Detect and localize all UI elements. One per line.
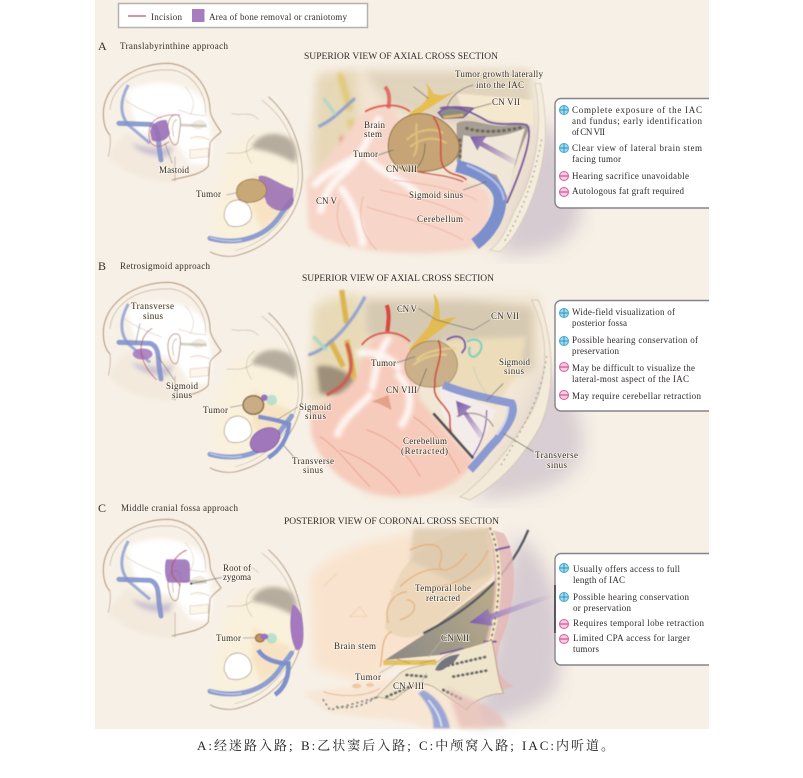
label: CN VII C: CN VII: [441, 633, 469, 643]
icon: plus: [560, 106, 568, 114]
con text 2: May require cerebellar retraction: [572, 391, 702, 401]
label: Sigmoid sinus oblique: Sigmoid: [299, 402, 332, 412]
caption: A:经迷路入路;: [197, 738, 295, 753]
icon: minus: [560, 620, 568, 628]
con text 1: Requires temporal lobe retraction: [573, 618, 704, 628]
legend: bone removal label: Area of bone removal or craniotomy: [209, 12, 348, 22]
panel C view title: POSTERIOR VIEW OF CORONAL CROSS SECTION: [284, 517, 499, 527]
label: CN VII A: CN VII: [492, 97, 520, 107]
con text 2: [573, 633, 690, 654]
label: Cerebellum A: Cerebellum: [417, 214, 463, 224]
pro text 2: or preservation: [573, 603, 632, 613]
con text 1: lateral-most aspect of the IAC: [572, 374, 689, 384]
label: Cerebellum retracted: [401, 436, 448, 456]
panel A view title: SUPERIOR VIEW OF AXIAL CROSS SECTION: [304, 52, 498, 62]
label: Cerebellum retracted: (Retracted): [401, 446, 448, 456]
pro text 1: Complete exposure of the IAC: [572, 105, 702, 115]
caption: B:乙状窦后入路;: [301, 738, 413, 753]
label: Sigmoid sinus oblique: sinus: [305, 411, 326, 421]
icon: plus: [560, 336, 568, 346]
label: Temporal lobe retracted: [415, 583, 471, 603]
label: CN VIII C: CN VIII: [393, 681, 424, 691]
label: Transverse sinus skull: [131, 301, 174, 321]
con text 1: [572, 363, 695, 384]
panel C heading: Middle cranial fossa approach: [121, 503, 238, 513]
panel C coronal cross section illustration: [303, 528, 561, 728]
label: Transverse sinus oblique: sinus: [303, 465, 323, 475]
label: Tumor oblique B: Tumor: [203, 405, 228, 415]
icon: plus: [560, 564, 568, 572]
label: Transverse sinus B: sinus: [547, 460, 567, 470]
label: Temporal lobe retracted: Temporal lobe: [415, 583, 471, 593]
label: Tumor growth: Tumor growth laterally: [455, 69, 544, 79]
label: into the IAC: into the IAC: [476, 80, 524, 90]
background panel: [95, 0, 709, 729]
con text 2: Autologous fat graft required: [572, 186, 684, 196]
pro text 2: facing tumor: [572, 154, 621, 164]
panel A side skull illustration: [103, 63, 221, 182]
pro text 1: of CN VII: [572, 127, 605, 137]
panel B view title: SUPERIOR VIEW OF AXIAL CROSS SECTION: [302, 274, 494, 284]
pro text 1: length of IAC: [573, 575, 625, 585]
panel B letter: B: [98, 259, 106, 273]
pro text 2: [572, 143, 702, 164]
label: Sigmoid sinus B: [499, 357, 530, 376]
icon: minus: [560, 362, 568, 372]
label: Sigmoid sinus oblique: [299, 402, 332, 421]
panel A heading: Translabyrinthine approach: [120, 41, 228, 51]
con text 1: Hearing sacrifice unavoidable: [572, 171, 689, 181]
caption: IAC:内听道。: [522, 738, 616, 753]
callout C: [555, 554, 709, 665]
label: Transverse sinus B: [535, 450, 578, 470]
legend: incision label: Incision: [151, 12, 182, 22]
label: Brain: Brain: [364, 120, 386, 130]
pro text 2: preservation: [572, 346, 620, 356]
con text 2: tumors: [573, 644, 599, 654]
pro text 1: [572, 307, 675, 328]
pro text 1: posterior fossa: [572, 318, 627, 328]
pro text 1: [573, 564, 680, 585]
icon: minus: [560, 390, 568, 400]
panel C oblique skull illustration: [210, 550, 303, 709]
label: Tumor C: Tumor: [355, 672, 381, 682]
label: Tumor oblique C: Tumor: [216, 633, 241, 643]
label: Root of zygoma: Root of: [223, 563, 251, 573]
label: Root of zygoma: [223, 563, 251, 582]
legend: incision line: [128, 15, 146, 17]
caption: C:中颅窝入路;: [419, 738, 516, 753]
panel B axial cross section illustration: [308, 290, 583, 500]
pro text 1: and fundus; early identification: [572, 116, 702, 126]
label: Temporal lobe retracted: retracted: [426, 593, 460, 603]
pro text 1: Wide-field visualization of: [572, 307, 675, 317]
label: Sigmoid sinus skull: [166, 381, 198, 400]
icon: minus: [560, 188, 568, 196]
label: Sigmoid sinus B: Sigmoid: [499, 357, 530, 367]
label: Tumor B: Tumor: [371, 358, 396, 368]
panel B heading: Retrosigmoid approach: [120, 261, 210, 271]
pro text 1: Usually offers access to full: [573, 564, 680, 574]
label: CN VII B: CN VII: [491, 311, 519, 321]
pro text 2: Clear view of lateral brain stem: [572, 143, 702, 153]
label: Sigmoid sinus A: Sigmoid sinus: [409, 190, 463, 200]
icon: plus: [560, 308, 568, 318]
panel B oblique skull illustration: [210, 313, 302, 472]
pro text 1: [572, 105, 702, 137]
panel B: retrosigmoid approach: [98, 259, 709, 500]
icon: plus: [560, 592, 568, 602]
legend: [118, 4, 368, 28]
icon: plus: [560, 144, 568, 152]
label: Transverse sinus B: Transverse: [535, 450, 578, 460]
label: Transverse sinus skull: Transverse: [131, 301, 174, 311]
panel C side skull illustration: [103, 519, 221, 638]
panel A oblique skull illustration: [210, 97, 302, 256]
con text 1: May be difficult to visualize the: [572, 363, 695, 373]
label: CN VIII A: CN VIII: [386, 164, 417, 174]
label: Tumor oblique A: Tumor: [196, 189, 221, 199]
label: Sigmoid sinus skull: sinus: [172, 390, 192, 400]
panel C letter: C: [98, 501, 106, 515]
pro text 2: [572, 335, 698, 356]
label: CN V A: CN V: [316, 196, 338, 206]
con text 2: Limited CPA access for larger: [573, 633, 690, 643]
panel A: translabyrinthine approach: [98, 39, 709, 256]
icon: minus: [560, 634, 568, 644]
panel B side skull illustration: [103, 282, 221, 401]
panel C craniotomy, incision and zygoma pointer: [165, 550, 222, 586]
pro text 2: Possible hearing conservation: [573, 592, 690, 602]
label: Sigmoid sinus B: sinus: [504, 366, 524, 376]
pro text 2: Possible hearing conservation of: [572, 335, 698, 345]
label: CN VIII B: CN VIII: [386, 385, 417, 395]
legend: bone removal swatch: [192, 9, 204, 22]
panel C: middle cranial fossa approach: [98, 501, 709, 728]
label: Brain stem C: Brain stem: [334, 641, 376, 651]
label: CN V B: CN V: [397, 304, 418, 314]
label: Mastoid: Mastoid: [159, 165, 190, 175]
callout A: [555, 98, 709, 208]
label: Cerebellum retracted: Cerebellum: [403, 436, 447, 446]
label: stem: stem: [364, 129, 382, 139]
label: Transverse sinus oblique: Transverse: [292, 456, 334, 466]
icon: minus: [560, 172, 568, 180]
label: Root of zygoma: zygoma: [223, 572, 251, 582]
label: Tumor A: Tumor: [353, 149, 378, 159]
label: Transverse sinus skull: sinus: [143, 311, 163, 321]
panel A letter: A: [98, 39, 107, 53]
pro text 2: [573, 592, 690, 613]
callout B: [555, 300, 709, 411]
label: Sigmoid sinus skull: Sigmoid: [166, 381, 198, 391]
label: Transverse sinus oblique: [292, 456, 334, 475]
panel A axial cross section illustration: [307, 70, 581, 254]
